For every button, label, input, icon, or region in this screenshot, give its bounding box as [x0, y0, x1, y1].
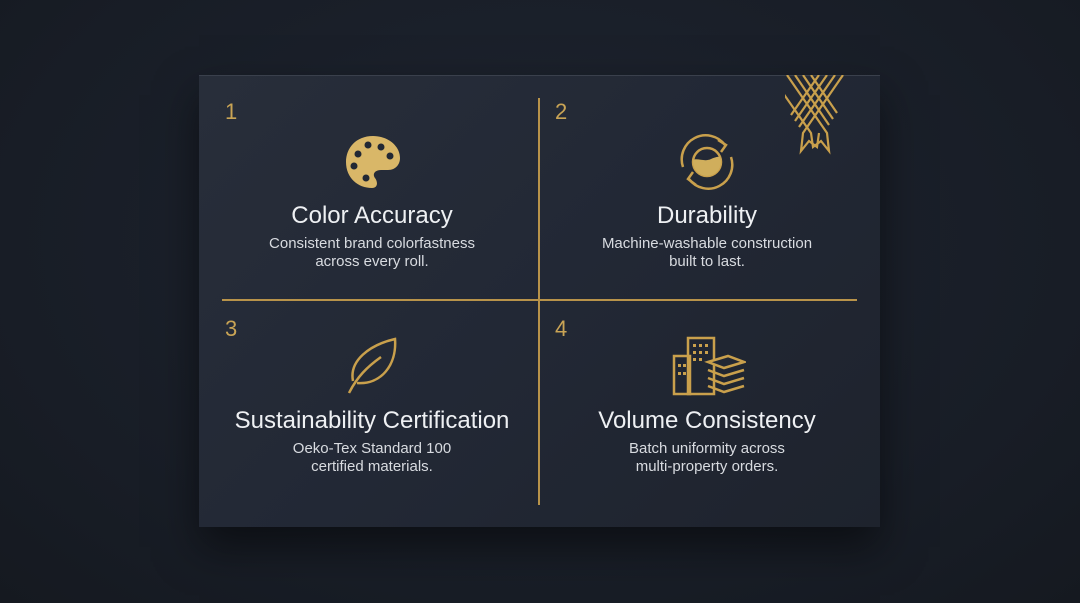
heading: Sustainability Certification: Sustainability Certification [235, 407, 509, 434]
text: color accuracy description [269, 235, 475, 270]
divider lines [538, 98, 540, 505]
icon: palette [346, 136, 400, 188]
icon: ribbon [785, 75, 844, 154]
icon: buildings and stack [672, 336, 746, 396]
text: color accuracy description: across every roll. [315, 253, 429, 270]
text: volume description [629, 440, 785, 475]
heading: Durability: Durability [657, 202, 757, 229]
number 2: 2 [555, 99, 567, 124]
icon: leaf [348, 338, 396, 394]
number 3: 3 [225, 316, 237, 341]
text: durability description [602, 235, 812, 270]
text: volume description: Batch uniformity across [629, 440, 785, 457]
text: durability description: Machine-washable construction [602, 235, 812, 252]
text: sustainability description: Oeko-Tex Standard 100 [293, 440, 451, 457]
heading: Color Accuracy: Color Accuracy [291, 202, 453, 229]
heading: Volume Consistency: Volume Consistency [598, 407, 816, 434]
text: durability description: built to last. [669, 253, 745, 270]
icon: durability cycle [680, 134, 734, 190]
text: volume description: multi-property orders. [636, 458, 778, 475]
number 1: 1 [225, 99, 237, 124]
number 4: 4 [555, 316, 567, 341]
text: color accuracy description: Consistent brand colorfastness [269, 235, 475, 252]
text: sustainability description [293, 440, 451, 475]
card [199, 75, 880, 527]
text: sustainability description: certified materials. [311, 458, 433, 475]
